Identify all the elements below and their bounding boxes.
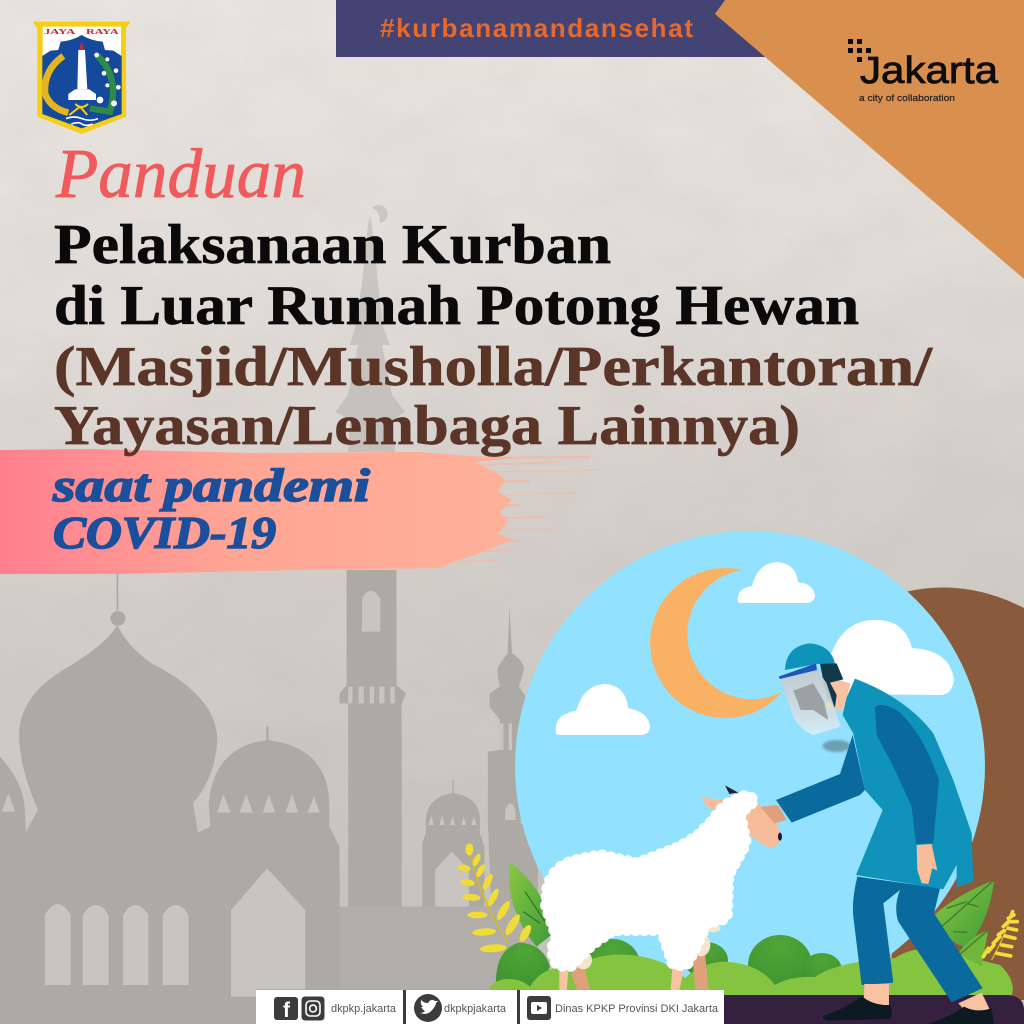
pandemic label: COVID-19 — [53, 508, 276, 558]
sheep legs — [559, 924, 721, 991]
facebook handle: dkpkp.jakarta — [331, 1003, 397, 1015]
ground: green hills — [488, 935, 1013, 995]
robe sleeve — [875, 705, 939, 844]
shadow under shield — [823, 740, 851, 752]
ground: purple strip — [700, 995, 1024, 1024]
sheep head — [740, 802, 782, 847]
subtitle: venues: (Masjid/Musholla/Perkantoran/ — [54, 336, 934, 398]
sheep ear and horn — [701, 785, 738, 813]
subtitle: venues: Yayasan/Lembaga Lainnya) — [54, 395, 800, 457]
youtube channel: Dinas KPKP Provinsi DKI Jakarta — [555, 1003, 719, 1015]
icon: facebook — [274, 997, 298, 1022]
hair and beard — [820, 663, 843, 707]
extended arm — [762, 735, 865, 823]
sheep wool body — [546, 795, 755, 967]
lowered hand — [917, 844, 937, 884]
icon: clouds — [556, 562, 954, 735]
left plants — [457, 843, 573, 989]
footer social bar — [256, 990, 724, 1024]
large leaf — [933, 880, 994, 967]
brush stroke panel — [0, 449, 600, 574]
lower mosque body, domes and towers — [0, 570, 538, 1024]
robe — [843, 679, 973, 889]
cap — [785, 643, 835, 670]
twitter handle: dkpkpjakarta — [444, 1003, 507, 1015]
icon: facebook: f — [283, 999, 291, 1022]
icon: youtube — [527, 996, 551, 1020]
sky circle — [515, 531, 985, 1001]
navy hashtag banner — [336, 0, 765, 57]
pandemic label: saat pandemi — [52, 460, 370, 512]
pandemic label — [52, 460, 370, 558]
icon: Jakarta coat of arms: JAYA — [44, 27, 76, 36]
yellow fern left — [457, 843, 533, 953]
icon: Jakarta coat of arms: RAYA — [86, 27, 119, 36]
title: black lines: Pelaksanaan Kurban — [54, 214, 611, 276]
icon: crescent moon — [650, 568, 782, 718]
icon: instagram — [302, 997, 324, 1020]
feet and shoes — [823, 984, 994, 1024]
icon: Jakarta coat of arms — [33, 22, 131, 134]
Jakarta logo: a city of collaboration — [859, 93, 955, 104]
orange corner panel — [715, 0, 1024, 279]
Jakarta logo — [848, 39, 999, 104]
sheep — [546, 785, 782, 991]
tree trunk — [890, 588, 1024, 1000]
right plants — [933, 880, 1017, 967]
Jakarta logo: Jakarta — [860, 50, 999, 92]
green leaf — [509, 862, 553, 947]
neck and face — [822, 675, 851, 711]
trousers — [853, 877, 983, 1002]
face shield — [779, 663, 841, 735]
bush — [488, 943, 573, 989]
subtitle: venues — [54, 336, 934, 457]
navy hashtag banner: #kurbanamandansehat — [380, 13, 693, 43]
script heading: Panduan: Panduan — [55, 136, 306, 213]
title: black lines: di Luar Rumah Potong Hewan — [54, 275, 859, 337]
yellow fern right — [983, 910, 1017, 960]
icon: twitter — [414, 994, 442, 1022]
mosque silhouette background — [0, 205, 538, 1024]
title: black lines — [54, 214, 859, 337]
man with face shield — [762, 643, 994, 1024]
minaret upper section — [335, 205, 405, 452]
arched windows — [2, 591, 515, 997]
